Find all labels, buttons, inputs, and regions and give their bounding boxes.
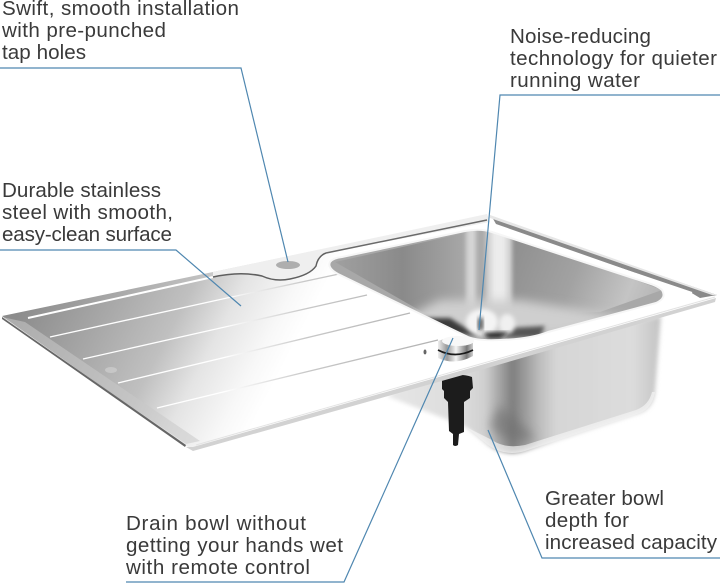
drainer plate bbox=[2, 214, 717, 451]
callout text: remote control: with remote control bbox=[125, 556, 310, 579]
callout text: bowl depth: Greater bowl bbox=[545, 487, 664, 510]
leader line: bowl depth bbox=[488, 430, 720, 558]
callout text: noise reduction: technology for quieter bbox=[510, 47, 717, 70]
callout text: remote control: Drain bowl without bbox=[126, 512, 306, 535]
leader line: remote control bbox=[126, 338, 453, 582]
leader line: tap holes bbox=[0, 68, 288, 262]
callout text: installation: with pre-punched bbox=[1, 19, 166, 42]
drainer rim curve bbox=[213, 253, 326, 280]
bowl rim highlight bbox=[329, 230, 664, 340]
callout text: noise reduction bbox=[510, 25, 717, 92]
callout text: stainless steel: steel with smooth, bbox=[2, 201, 173, 224]
leader line: noise-reducing bbox=[479, 95, 720, 330]
drain fitting bbox=[442, 375, 473, 446]
leader line: stainless steel bbox=[0, 250, 241, 306]
callout text: stainless steel: Durable stainless bbox=[2, 179, 161, 202]
back ledge bbox=[213, 214, 490, 280]
callout text: installation bbox=[1, 0, 239, 64]
callout text: stainless steel: easy-clean surface bbox=[2, 223, 172, 246]
callout text: bowl depth: depth for bbox=[545, 509, 629, 532]
right ledge bbox=[492, 217, 717, 298]
callout text: remote control bbox=[125, 512, 343, 579]
callout text: noise reduction: Noise-reducing bbox=[510, 25, 651, 48]
callout text: remote control: getting your hands wet bbox=[126, 534, 343, 557]
bowl exterior bbox=[387, 316, 661, 453]
callout text: bowl depth bbox=[545, 487, 718, 554]
rim line around bowl bbox=[326, 220, 487, 253]
tap hole bbox=[276, 261, 300, 269]
logo mark bbox=[105, 367, 117, 373]
callout text: stainless steel bbox=[2, 179, 173, 246]
callout text: noise reduction: running water bbox=[510, 69, 640, 92]
drain grooves bbox=[28, 268, 438, 408]
remote control knob bbox=[424, 336, 474, 362]
sink illustration bbox=[2, 214, 717, 453]
callout text: installation: tap holes bbox=[2, 41, 86, 64]
bowl interior bbox=[330, 230, 662, 340]
callout text: bowl depth: increased capacity bbox=[545, 531, 718, 554]
